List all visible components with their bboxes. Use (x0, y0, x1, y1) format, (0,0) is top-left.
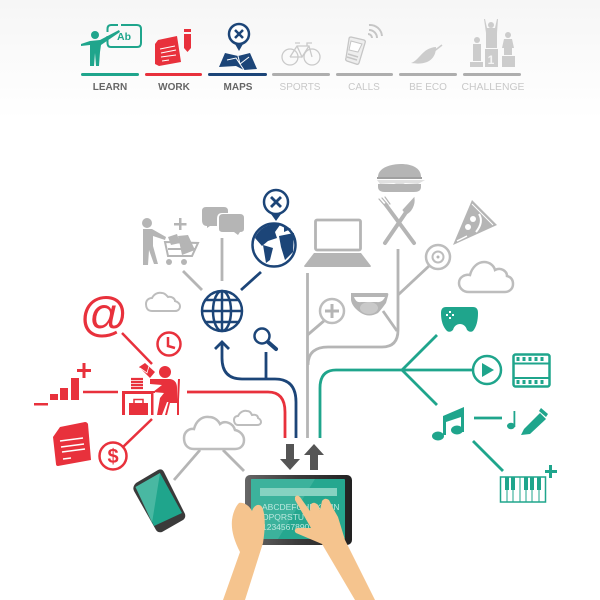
icon: data arrows (280, 444, 324, 470)
icon: worker at desk (122, 363, 180, 415)
tab: learn (81, 25, 141, 93)
icon: fork and knife (379, 197, 414, 243)
tab: calls: CALLS (348, 82, 380, 93)
icon: mouth with tongue (351, 293, 388, 316)
icon: burger (377, 164, 425, 192)
icon: growth bars (34, 363, 91, 406)
tab: sports (272, 43, 330, 93)
icon: smartphone (133, 469, 185, 532)
tab: challenge: CHALLENGE (462, 82, 525, 93)
icon: web globe (202, 291, 242, 331)
connector: navy maps path (215, 342, 296, 438)
icon: clock (158, 332, 180, 356)
tab: be eco: BE ECO (409, 82, 447, 93)
icon: play button (473, 356, 501, 384)
tab: learn: LEARN (93, 82, 127, 93)
connector: cloud spokes (174, 450, 244, 480)
connector: navy earth spoke (241, 272, 261, 290)
icon: plus circle (320, 299, 344, 323)
icon: target (426, 245, 450, 269)
tab: be eco (399, 45, 457, 93)
icon: film strip (514, 354, 550, 386)
tab: work: WORK (158, 82, 191, 93)
tablet: 1234567890 (262, 522, 310, 532)
icon: small note (507, 411, 515, 429)
connector: gray food and laptop paths (308, 249, 429, 438)
connector: gray shopping spokes (183, 238, 222, 290)
tab: challenge: 1 (488, 53, 495, 67)
icon: dollar coin (100, 442, 126, 470)
connector: teal media path (320, 335, 503, 471)
tablet: ABCDEFGHIJKLMN (262, 502, 339, 512)
icon: at sign: @ (80, 289, 128, 342)
tab: work (145, 29, 202, 93)
icon: laptop (304, 220, 371, 267)
tablet: OPQRSTUVWXYZ (262, 512, 334, 522)
tab: learn: Ab (117, 31, 131, 43)
icon: red document (53, 422, 91, 466)
icon: small cloud left (146, 293, 180, 311)
icon: dollar coin: $ (107, 446, 119, 468)
icon: large cloud (184, 417, 244, 449)
hands (223, 496, 375, 600)
connector: at line (122, 333, 152, 364)
connector: desk lines (83, 392, 152, 447)
icon: speech bubbles (202, 207, 244, 235)
icon: magnifier (254, 328, 276, 349)
icon: music notes (432, 407, 464, 440)
connector: red work path (187, 392, 285, 438)
icon: pencil (521, 408, 548, 435)
right hand (295, 496, 375, 600)
icon: shopper with cart (142, 218, 198, 265)
navigation bar (81, 19, 525, 93)
left hand (223, 503, 265, 600)
icon: small cloud centre (234, 411, 261, 425)
tab: maps: MAPS (224, 82, 253, 93)
icon: cloud right (459, 262, 513, 292)
icon: gamepad (441, 307, 478, 332)
tab: challenge (462, 19, 525, 93)
icon: piano keyboard (500, 465, 557, 502)
tab: sports: SPORTS (280, 82, 321, 93)
tab: calls (336, 25, 393, 93)
tablet (245, 475, 352, 545)
icon: earth with pin (252, 190, 296, 266)
tab: maps (208, 24, 267, 93)
icon: pizza slice (453, 200, 497, 245)
